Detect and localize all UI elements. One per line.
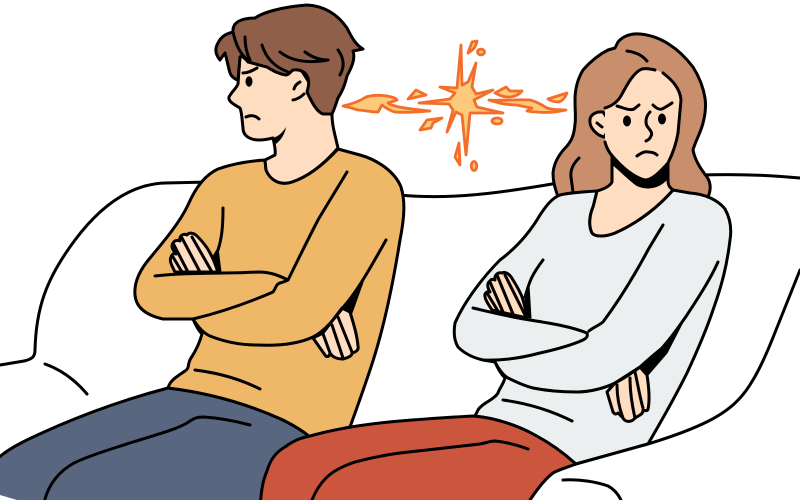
left flame — [343, 95, 430, 112]
sofa seat cushion — [525, 270, 800, 500]
man's head — [216, 5, 363, 183]
man's hair — [216, 5, 363, 114]
man's neck and face — [229, 55, 338, 183]
woman's ear — [590, 112, 612, 137]
man's mouth — [246, 116, 259, 119]
man's jeans — [0, 388, 330, 500]
man's underarm line and shadow — [218, 208, 223, 250]
woman's eyes — [623, 114, 666, 126]
woman's head — [590, 68, 681, 236]
woman's sweater — [454, 190, 731, 464]
woman's ear detail — [597, 123, 602, 127]
woman's neck — [590, 153, 673, 236]
woman's nose — [646, 112, 652, 141]
woman's hair — [553, 34, 710, 197]
man's ear — [293, 82, 304, 100]
woman's crossed arm lines — [589, 225, 663, 331]
red trousers — [260, 416, 576, 500]
woman's left hand fingers — [485, 272, 527, 318]
small flame fragments — [408, 90, 426, 99]
man's sweater — [135, 149, 404, 437]
man's brow — [243, 68, 257, 73]
woman's chin shadow — [614, 160, 668, 187]
man's right hand fingers — [313, 308, 358, 359]
woman's face — [605, 68, 681, 180]
woman's underarm line and shadow — [525, 260, 543, 297]
woman's mouth — [637, 152, 657, 156]
sofa outline — [0, 175, 800, 394]
man's jaw shadow — [273, 127, 286, 144]
man's eye — [246, 76, 252, 87]
sparks of anger between the couple — [343, 41, 567, 170]
man's left hand fingers — [170, 233, 218, 272]
woman's right hand fingers — [607, 367, 649, 421]
right flame — [489, 100, 566, 112]
woman's brows — [617, 103, 672, 110]
man's hair strands — [233, 32, 343, 75]
woman's sweater fold — [503, 400, 572, 421]
man's sweater fold — [195, 370, 260, 389]
central spark — [419, 45, 503, 155]
man's crossed arm lines — [155, 172, 347, 280]
